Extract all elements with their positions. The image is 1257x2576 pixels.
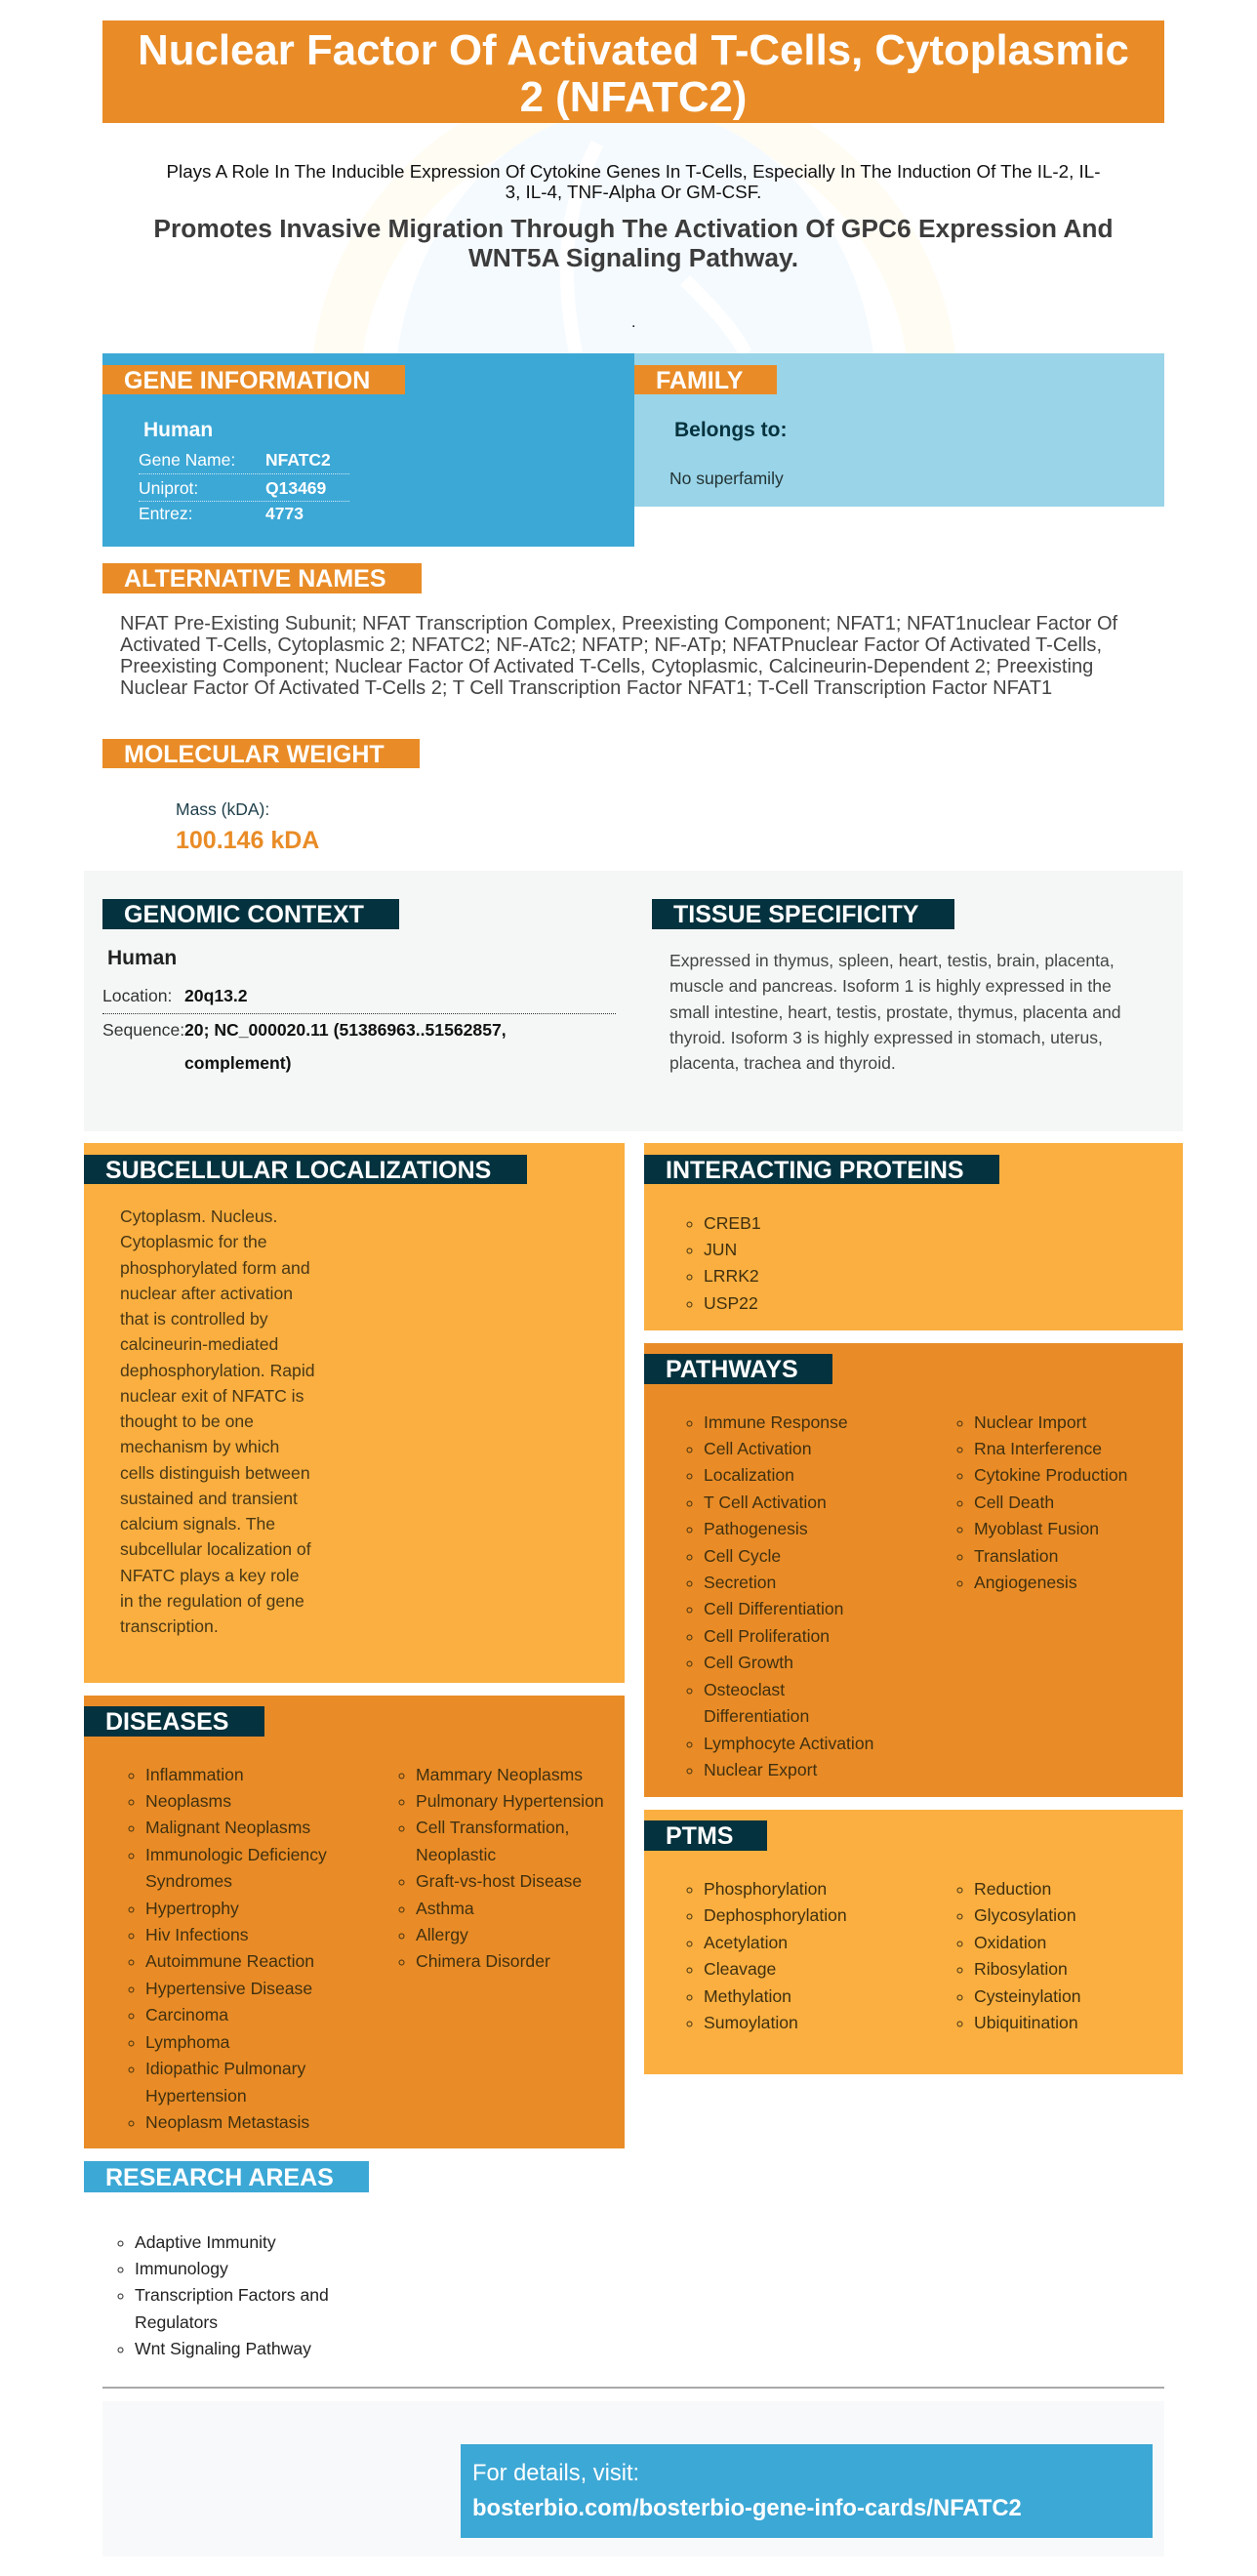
list: ptms column 2: Glycosylation xyxy=(974,1905,1076,1925)
gene name row: NFATC2 xyxy=(265,450,331,470)
heading: pathways: PATHWAYS xyxy=(666,1356,798,1383)
list: ptms column 2: Oxidation xyxy=(974,1933,1046,1952)
list: research areas: Immunology xyxy=(135,2259,228,2278)
list: proteins xyxy=(687,1212,761,1313)
uniprot row xyxy=(139,477,349,502)
list: pathways column 1: Cell Differentiation xyxy=(704,1599,843,1618)
heading: subcellular localizations: SUBCELLULAR LOCALIZATIONS xyxy=(105,1157,491,1184)
tissue specificity text: thyroid. Isoform 3 is highly expressed in stomach, uterus, xyxy=(669,1028,1103,1047)
sequence row: Sequence: xyxy=(102,1020,184,1040)
list: research areas: Regulators xyxy=(135,2312,218,2332)
list: pathways column 2: Nuclear Import xyxy=(974,1411,1086,1431)
list: ptms column 2 xyxy=(956,1879,1081,2032)
heading: family: FAMILY xyxy=(656,367,743,394)
list: pathways column 1: Immune Response xyxy=(704,1411,848,1431)
list: pathways column 1: Cell Cycle xyxy=(704,1546,781,1566)
subcellular text: that is controlled by xyxy=(120,1309,268,1329)
heading: interacting proteins: INTERACTING PROTEINS xyxy=(666,1157,964,1184)
panel: family xyxy=(634,353,1164,507)
subcellular text: mechanism by which xyxy=(120,1437,279,1456)
list: pathways column 2: Rna Interference xyxy=(974,1439,1102,1458)
list: pathways column 1: Differentiation xyxy=(704,1706,809,1726)
list: ptms column 1: Acetylation xyxy=(704,1933,788,1952)
heading: genomic context: GENOMIC CONTEXT xyxy=(124,901,364,928)
list: pathways column 1: Cell Proliferation xyxy=(704,1626,830,1646)
list: ptms column 2: Cysteinylation xyxy=(974,1986,1081,2006)
list: pathways column 1: Pathogenesis xyxy=(704,1519,808,1538)
description: Plays A Role In The Inducible Expression Of Cytokine Genes In T-Cells, Especially In The Induction Of The IL-2, IL- xyxy=(167,161,1100,182)
list: diseases column 1: Hypertrophy xyxy=(145,1899,239,1918)
url: bosterbio.com/bosterbio-gene-info-cards/NFATC2 xyxy=(472,2495,1022,2521)
location row xyxy=(102,985,616,1014)
title banner: 2 (NFATC2) xyxy=(520,73,747,121)
subcellular text: cells distinguish between xyxy=(120,1462,310,1482)
list: diseases column 1: Neoplasms xyxy=(145,1791,231,1811)
list: ptms column 1 xyxy=(687,1879,847,2032)
subcellular text: in the regulation of gene xyxy=(120,1591,304,1611)
heading: tissue specificity: TISSUE SPECIFICITY xyxy=(673,901,918,928)
list: diseases column 2: Pulmonary Hypertension xyxy=(416,1791,604,1811)
heading: diseases: DISEASES xyxy=(105,1708,228,1736)
list: pathways column 1 xyxy=(687,1411,873,1779)
alternative names text: Preexisting Component; Nuclear Factor Of Activated T-Cells, Cytoplasmic, Calcineurin-Dependent 2; Preexisting xyxy=(120,656,1093,677)
subcellular text: sustained and transient xyxy=(120,1489,298,1508)
tissue specificity text: Expressed in thymus, spleen, heart, testis, brain, placenta, xyxy=(669,951,1115,970)
subcellular text: Cytoplasm. Nucleus. xyxy=(120,1206,277,1226)
list: pathways column 1: Osteoclast xyxy=(704,1680,785,1699)
subtitle: Promotes Invasive Migration Through The Activation Of GPC6 Expression And xyxy=(153,214,1114,243)
list: proteins: CREB1 xyxy=(704,1212,761,1232)
list: pathways column 2: Cytokine Production xyxy=(974,1465,1127,1485)
heading: ptms xyxy=(644,1820,767,1851)
tissue specificity text: muscle and pancreas. Isoform 1 is highly expressed in the xyxy=(669,976,1112,996)
list: diseases column 2: Allergy xyxy=(416,1925,468,1944)
subcellular text: phosphorylated form and xyxy=(120,1257,310,1277)
text: complement) xyxy=(184,1053,291,1073)
list: pathways column 1: Nuclear Export xyxy=(704,1760,817,1779)
subcellular text: nuclear exit of NFATC is xyxy=(120,1386,304,1406)
subtitle xyxy=(153,214,1114,272)
list: ptms column 2: Ubiquitination xyxy=(974,2013,1078,2032)
list: pathways column 2: Angiogenesis xyxy=(974,1573,1077,1592)
location row: 20q13.2 xyxy=(184,986,248,1005)
list: diseases column 1: Hypertensive Disease xyxy=(145,1979,312,1998)
list: pathways column 1: Lymphocyte Activation xyxy=(704,1734,873,1753)
heading: molecular weight: MOLECULAR WEIGHT xyxy=(124,741,385,768)
subtitle: WNT5A Signaling Pathway. xyxy=(468,243,798,272)
heading: pathways xyxy=(644,1354,832,1384)
list: diseases column 1: Neoplasm Metastasis xyxy=(145,2112,309,2132)
list: research areas: Adaptive Immunity xyxy=(135,2231,276,2251)
list: diseases column 1: Idiopathic Pulmonary xyxy=(145,2059,305,2078)
list: pathways column 1: Cell Activation xyxy=(704,1439,812,1458)
list: diseases column 1: Autoimmune Reaction xyxy=(145,1951,314,1971)
list: diseases column 1: Hypertension xyxy=(145,2086,247,2106)
title banner xyxy=(102,20,1164,123)
dot: . xyxy=(631,314,635,331)
list: pathways column 2: Translation xyxy=(974,1546,1058,1566)
panel: diseases xyxy=(84,1696,625,2148)
list: ptms column 1: Sumoylation xyxy=(704,2013,798,2032)
list: diseases column 2: Chimera Disorder xyxy=(416,1951,550,1971)
list: pathways column 2: Cell Death xyxy=(974,1492,1054,1512)
list: pathways column 2 xyxy=(956,1411,1127,1592)
sequence row xyxy=(102,1020,507,1073)
list: diseases column 1: Lymphoma xyxy=(145,2032,229,2052)
list: research areas: Wnt Signaling Pathway xyxy=(135,2339,311,2358)
list: ptms column 1: Phosphorylation xyxy=(704,1879,827,1899)
uniprot row: Uniprot: xyxy=(139,478,198,498)
alternative names text xyxy=(120,613,1118,699)
list: ptms column 2: Reduction xyxy=(974,1879,1051,1899)
subcellular text: thought to be one xyxy=(120,1411,254,1431)
list: diseases column 2: Neoplastic xyxy=(416,1845,496,1864)
list: proteins: JUN xyxy=(704,1240,737,1259)
gene name row: Gene Name: xyxy=(139,450,235,470)
list: ptms column 1: Cleavage xyxy=(704,1959,776,1979)
subcellular text: calcineurin-mediated xyxy=(120,1334,278,1354)
family belongs to: Belongs to: xyxy=(674,419,787,441)
subcellular text: dephosphorylation. Rapid xyxy=(120,1361,315,1380)
tissue specificity text: small intestine, heart, testis, prostate, thymus, placenta and xyxy=(669,1002,1121,1022)
panel: gene information xyxy=(102,353,634,547)
background watermark logo xyxy=(314,123,954,353)
mass value: 100.146 kDA xyxy=(176,827,319,854)
list: diseases column 2: Graft-vs-host Disease xyxy=(416,1871,582,1891)
species label: Human xyxy=(143,419,213,441)
callout: details link xyxy=(461,2444,1153,2538)
heading: research areas: RESEARCH AREAS xyxy=(105,2164,334,2191)
heading: gene information: GENE INFORMATION xyxy=(124,367,370,394)
list: pathways column 1: Localization xyxy=(704,1465,794,1485)
list: diseases column 1: Immunologic Deficiency xyxy=(145,1845,327,1864)
list: diseases column 2: Cell Transformation, xyxy=(416,1818,569,1837)
list: diseases column 1: Inflammation xyxy=(145,1765,244,1784)
subcellular text: nuclear after activation xyxy=(120,1284,293,1303)
alternative names text: NFAT Pre-Existing Subunit; NFAT Transcription Complex, Preexisting Component; NFAT1; NFAT1nuclear Factor Of xyxy=(120,613,1117,634)
heading: diseases xyxy=(84,1706,264,1737)
tissue specificity text: placenta, trachea and thyroid. xyxy=(669,1053,896,1073)
list: diseases column 1 xyxy=(129,1765,327,2132)
panel: genomic context and tissue specificity xyxy=(84,871,1183,1131)
heading: family xyxy=(634,365,777,394)
alternative names text: Nuclear Factor Of Activated T-Cells 2; T Cell Transcription Factor NFAT1; T-Cell Transcription Factor NFAT1 xyxy=(120,677,1052,699)
sequence row: 20; NC_000020.11 (51386963..51562857, xyxy=(184,1020,507,1040)
species label: Human xyxy=(107,947,177,969)
list: diseases column 1: Syndromes xyxy=(145,1871,232,1891)
list: ptms column 1: Methylation xyxy=(704,1986,791,2006)
list: pathways column 2: Myoblast Fusion xyxy=(974,1519,1099,1538)
subcellular text: NFATC plays a key role xyxy=(120,1566,299,1585)
list: pathways column 1: Secretion xyxy=(704,1573,776,1592)
entrez row: Entrez: xyxy=(139,504,192,523)
mass label: Mass (kDA): xyxy=(176,799,269,819)
heading: alternative names: ALTERNATIVE NAMES xyxy=(124,565,386,593)
list: pathways column 1: Cell Growth xyxy=(704,1653,793,1672)
panel: footer xyxy=(102,2401,1164,2556)
family value: No superfamily xyxy=(669,469,784,488)
list: diseases column 2: Asthma xyxy=(416,1899,474,1918)
subcellular text: transcription. xyxy=(120,1616,219,1636)
list: diseases column 2: Mammary Neoplasms xyxy=(416,1765,583,1784)
list: proteins: USP22 xyxy=(704,1293,758,1313)
list: research areas: Transcription Factors and xyxy=(135,2285,329,2305)
list: ptms column 1: Dephosphorylation xyxy=(704,1905,847,1925)
visit label: For details, visit: xyxy=(472,2461,639,2486)
entrez row xyxy=(139,504,304,523)
subcellular text: Cytoplasmic for the xyxy=(120,1232,267,1251)
subcellular text: subcellular localization of xyxy=(120,1539,311,1559)
list: ptms column 2: Ribosylation xyxy=(974,1959,1068,1979)
location row: Location: xyxy=(102,986,172,1005)
list: diseases column 2 xyxy=(398,1765,604,1971)
list: pathways column 1: T Cell Activation xyxy=(704,1492,827,1512)
entrez row: 4773 xyxy=(265,504,304,523)
list: research areas xyxy=(117,2231,329,2358)
description xyxy=(167,161,1100,202)
uniprot row: Q13469 xyxy=(265,478,326,498)
subcellular text: calcium signals. The xyxy=(120,1514,275,1533)
divider xyxy=(102,2387,1164,2389)
alternative names text: Activated T-Cells, Cytoplasmic 2; NFATC2; NF-ATc2; NFATP; NF-ATp; NFATPnuclear Factor Of Activated T-Cells, xyxy=(120,634,1102,656)
list: diseases column 1: Hiv Infections xyxy=(145,1925,249,1944)
list: diseases column 1: Carcinoma xyxy=(145,2005,228,2024)
tissue specificity text xyxy=(669,951,1121,1073)
panel: ptms xyxy=(644,1810,1183,2074)
title banner: Nuclear Factor Of Activated T-Cells, Cytoplasmic xyxy=(138,26,1129,74)
panel: interacting proteins xyxy=(644,1143,1183,1330)
panel: pathways xyxy=(644,1343,1183,1797)
subcellular text xyxy=(120,1206,315,1636)
list: proteins: LRRK2 xyxy=(704,1266,759,1286)
heading: ptms: PTMS xyxy=(666,1822,733,1850)
list: diseases column 1: Malignant Neoplasms xyxy=(145,1818,310,1837)
gene name row xyxy=(139,449,349,474)
panel: subcellular localizations xyxy=(84,1143,625,1683)
description: 3, IL-4, TNF-Alpha Or GM-CSF. xyxy=(506,182,761,202)
